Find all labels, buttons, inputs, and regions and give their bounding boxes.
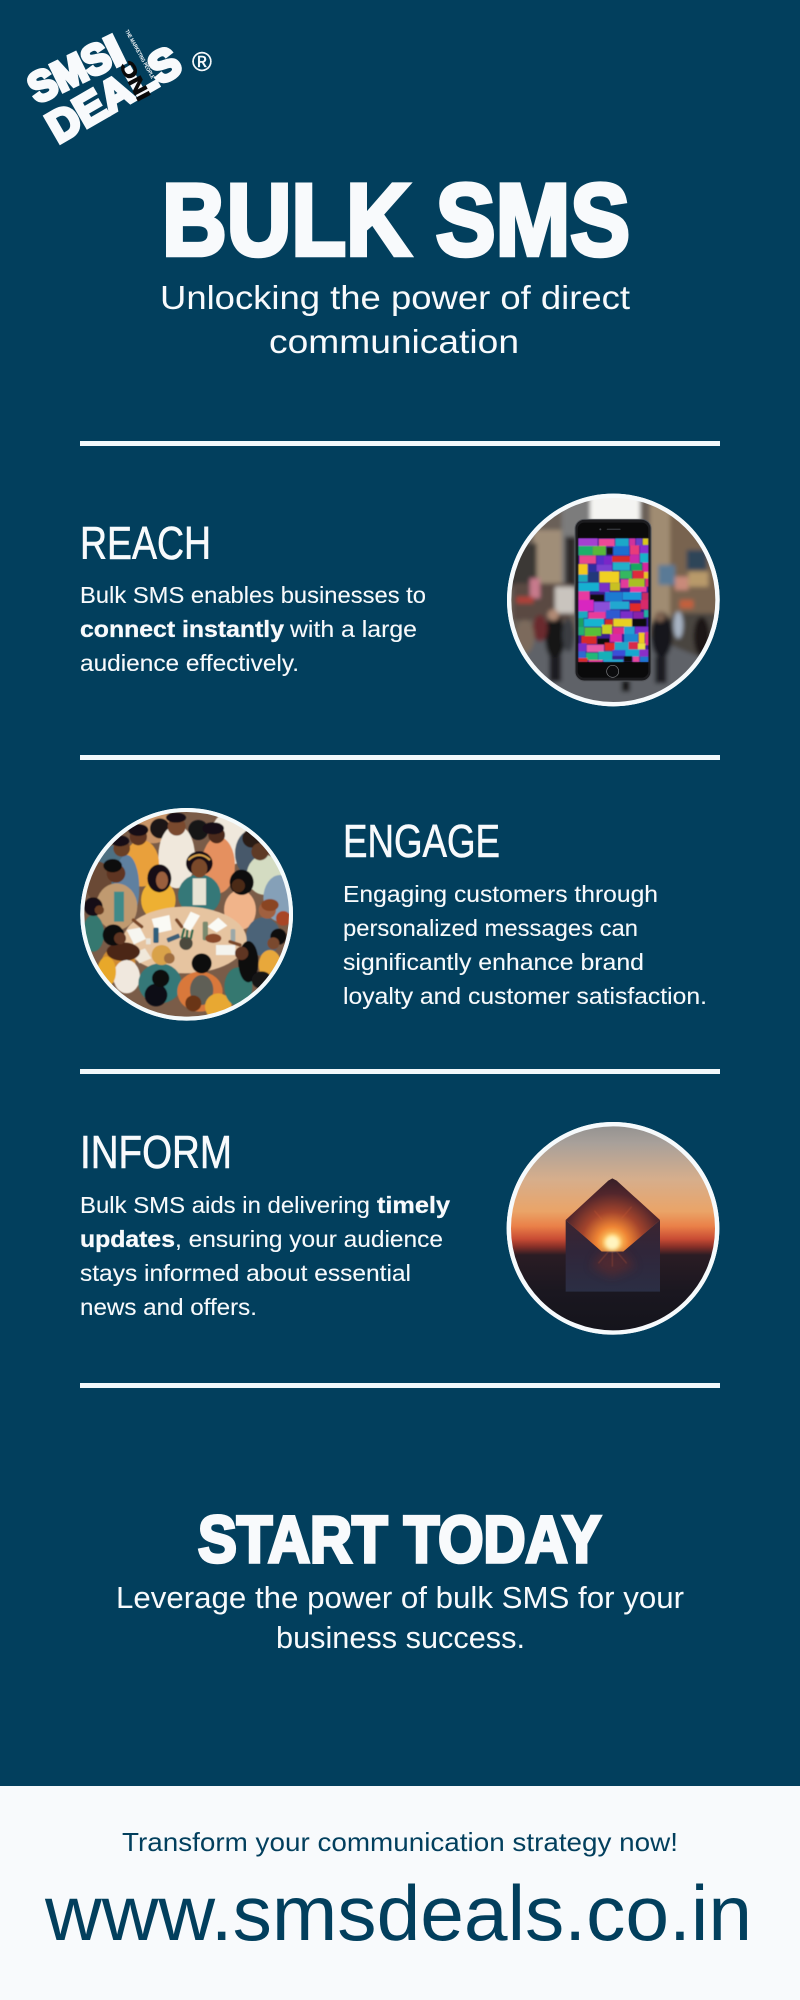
- registered mark: ®: [192, 47, 212, 77]
- text: reach description: [80, 582, 426, 676]
- text: inform description: timely: [377, 1192, 450, 1218]
- text: call to action: [116, 1580, 684, 1655]
- heading: inform: INFORM: [80, 1126, 232, 1178]
- text: engage description: [343, 881, 707, 1009]
- logo INC tag: INC: [116, 57, 155, 104]
- footer tagline: Transform your communication strategy now!: [122, 1827, 678, 1857]
- panel: inform: [80, 1122, 720, 1335]
- logo: SMS Deals Inc: [20, 26, 212, 153]
- heading: reach: REACH: [80, 517, 211, 569]
- panel: engage: [80, 807, 707, 1022]
- text: inform description: [80, 1192, 450, 1320]
- subtitle: communication: [269, 323, 519, 360]
- text: reach description: Bulk SMS enables businesses to: [80, 582, 426, 608]
- text: engage description: significantly enhance brand: [343, 949, 644, 975]
- text: reach description: with a large: [289, 616, 417, 642]
- subtitle: [160, 279, 630, 360]
- text: inform description: updates: [80, 1226, 175, 1252]
- text: reach description: audience effectively.: [80, 650, 299, 676]
- title: BULK SMS: [162, 163, 630, 277]
- heading: engage: ENGAGE: [343, 815, 500, 867]
- image: envelope glowing at sunset: [506, 1122, 720, 1335]
- text: inform description: news and offers.: [80, 1294, 257, 1320]
- text: inform description: , ensuring your audience: [175, 1226, 443, 1252]
- text: call to action: business success.: [276, 1620, 525, 1655]
- text: engage description: loyalty and customer satisfaction.: [343, 983, 707, 1009]
- subtitle: Unlocking the power of direct: [160, 279, 630, 316]
- text: engage description: personalized messages can: [343, 915, 638, 941]
- footer panel: [0, 1786, 800, 2000]
- logo word DEALS: DEALS: [38, 37, 189, 153]
- image: phone with colourful messages on a city street: [503, 490, 723, 717]
- website url: www.smsdeals.co.in: [44, 1869, 752, 1957]
- text: call to action: Leverage the power of bulk SMS for your: [116, 1580, 684, 1615]
- logo tagline: THE MARKETING PEOPLE: [123, 29, 155, 80]
- logo word SMS: SMS: [20, 32, 118, 112]
- image: illustrated group around a table: [80, 807, 297, 1022]
- text: engage description: Engaging customers through: [343, 881, 658, 907]
- text: reach description: connect instantly: [80, 616, 284, 642]
- heading: start today: START TODAY: [198, 1502, 601, 1576]
- panel: reach: [80, 490, 723, 717]
- text: inform description: stays informed about essential: [80, 1260, 411, 1286]
- text: inform description: Bulk SMS aids in delivering: [80, 1192, 370, 1218]
